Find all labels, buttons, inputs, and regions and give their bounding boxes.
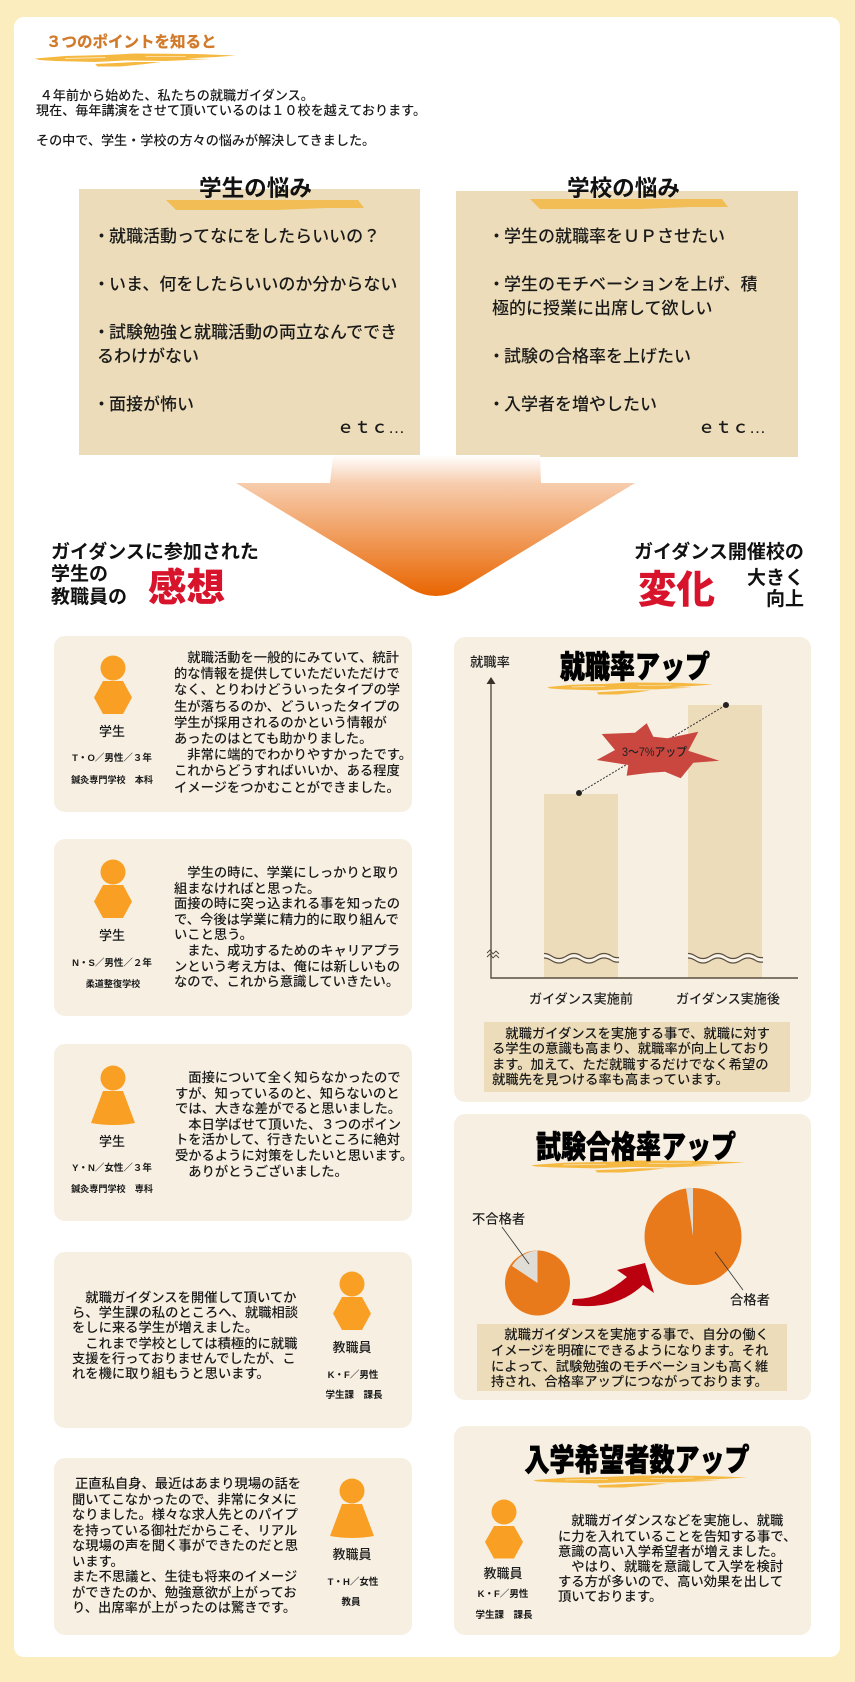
panel: employment rate up — [454, 637, 811, 1102]
description text: 就職ガイダンスなどを実施し、就職 — [571, 1513, 783, 1528]
person detail: K・F／男性 — [478, 1589, 528, 1600]
testimonial text: では、大きな差がでると思いました。 — [175, 1101, 401, 1116]
testimonial text: 面接の時に突っ込まれる事を知ったの — [174, 896, 400, 911]
panel: student worries — [79, 189, 420, 455]
description box — [484, 1022, 790, 1092]
testimonial text: 学生の時に、学業にしっかりと取り — [187, 865, 400, 880]
description text: 就職ガイダンスを実施する事で、自分の働く — [504, 1327, 769, 1342]
person label: 学生 — [99, 928, 125, 943]
testimonial text: 受かるように対策をしたいと思います。 — [175, 1148, 413, 1163]
bar chart: ガイダンス実施後 — [676, 990, 780, 1006]
person label: 教職員 — [332, 1547, 372, 1562]
testimonial text — [72, 1476, 301, 1615]
panel: school worries — [456, 191, 798, 457]
icon: male student — [94, 656, 132, 714]
description text: 就職先を見つける率も高まっています。 — [492, 1072, 729, 1087]
testimonial text: 非常に端的でわかりやすかったです。 — [187, 747, 412, 762]
person label: 学生 — [99, 724, 125, 739]
testimonial text: います。 — [72, 1554, 124, 1568]
title: ３つのポイントを知ると — [46, 34, 217, 51]
icon: female student — [91, 1066, 135, 1125]
heading: 試験合格率アップ — [536, 1130, 736, 1166]
heading lines: 教職員の — [51, 586, 127, 608]
brush underline — [533, 1476, 746, 1488]
testimonial text: れを機に取り組もうと思います。 — [72, 1366, 270, 1381]
etc note: ｅｔｃ… — [337, 418, 405, 437]
testimonial text: これからどうすればいいか、ある程度 — [174, 763, 400, 778]
testimonial text: 就職ガイダンスを開催して頂いてか — [85, 1290, 296, 1305]
description text: 持され、合格率アップにつながっております。 — [491, 1374, 768, 1389]
description text: 就職ガイダンスを実施する事で、就職に対す — [505, 1026, 770, 1041]
person detail: T・O／男性／３年 — [72, 753, 152, 764]
brush underline — [547, 682, 712, 694]
school name: 鍼灸専門学校 本科 — [71, 775, 153, 785]
description text — [491, 1327, 769, 1389]
testimonial text: 就職活動を一般的にみていて、統計 — [187, 650, 399, 665]
heading: student worries: 学生の悩み — [199, 176, 312, 201]
department: 学生課 課長 — [325, 1390, 382, 1401]
testimonial text: あったのはとても助かりました。 — [174, 731, 372, 746]
description text: 意識の高い入学希望者が増えました。 — [558, 1544, 784, 1559]
testimonial text: 面接について全く知らなかったので — [188, 1070, 401, 1085]
intro text: ４年前から始めた、私たちの就職ガイダンス。 — [40, 88, 314, 102]
heading lines: ガイダンスに参加された — [51, 542, 259, 562]
testimonial text: な現場の声を聞く事ができたのだと思 — [72, 1538, 298, 1553]
pie charts and arrow: 不合格者 — [472, 1212, 525, 1226]
bullet list: student worries: るわけがない — [97, 347, 199, 366]
testimonial text: ありがとうございました。 — [188, 1164, 348, 1179]
description text: やはり、就職を意識して入学を検討 — [571, 1559, 783, 1574]
heading lines: 学生の — [51, 564, 108, 585]
side text: 大きく — [747, 568, 804, 588]
heading underline — [530, 199, 728, 209]
bar chart: ガイダンス実施前 — [529, 990, 633, 1006]
testimonial text: なので、これから意識していきたい。 — [174, 974, 399, 989]
heading: 入学希望者数アップ — [524, 1444, 750, 1478]
person detail: N・S／男性／２年 — [72, 958, 152, 969]
bar chart: 3〜7%アップ — [622, 745, 687, 759]
bullet list: student worries: ・試験勉強と就職活動の両立なんででき — [93, 323, 397, 342]
intro text — [36, 88, 426, 148]
heading: school worries: 学校の悩み — [567, 176, 680, 201]
description text: に力を入れていることを告知する事で、 — [558, 1529, 796, 1544]
testimonial text — [174, 865, 400, 989]
panel: applicants up — [454, 1426, 811, 1635]
bullet list: student worries — [93, 227, 397, 414]
person label: 教職員 — [483, 1566, 522, 1581]
heading: change — [634, 542, 804, 612]
description text — [492, 1026, 770, 1087]
school name: 柔道整復学校 — [86, 979, 140, 989]
bullet list: student worries: ・就職活動ってなにをしたらいいの？ — [93, 227, 380, 246]
testimonial text: ができたのか、勉強意欲が上がってお — [72, 1584, 297, 1600]
testimonial text: なく、とりわけどういったタイプの学 — [174, 682, 400, 697]
bullet list: student worries: ・面接が怖い — [93, 395, 194, 414]
person label: 学生 — [99, 1134, 125, 1149]
panel: testimonial 4 — [54, 1252, 412, 1428]
icon: male staff — [485, 1500, 523, 1558]
pie charts and arrow — [472, 1188, 770, 1316]
intro text: 現在、毎年講演をさせて頂いているのは１０校を越えております。 — [36, 103, 426, 118]
brush underline: main title — [35, 54, 236, 66]
description text: ます。加えて、ただ就職するだけでなく希望の — [492, 1057, 769, 1072]
school name: 鍼灸専門学校 専科 — [71, 1184, 153, 1194]
person detail: Y・N／女性／３年 — [72, 1163, 152, 1174]
panel: exam pass rate up — [454, 1114, 811, 1400]
person detail: K・F／男性 — [328, 1370, 378, 1381]
testimonial text: 支援を行っておりませんでしたが、こ — [72, 1351, 296, 1366]
icon: male student — [94, 860, 132, 918]
bullet list: school worries: ・学生のモチベーションを上げ、積 — [488, 275, 757, 294]
icon: male staff — [333, 1272, 371, 1330]
highlight word: 感想 — [148, 567, 225, 610]
description text: 頂いております。 — [558, 1589, 662, 1604]
heading lines — [51, 542, 259, 608]
side text — [747, 568, 804, 610]
testimonial text: を持っている御社だからこそ、リアル — [72, 1522, 297, 1538]
department: 教員 — [341, 1597, 360, 1608]
testimonial text: ら、学生課の私のところへ、就職相談 — [72, 1305, 298, 1320]
side text: 向上 — [766, 589, 804, 610]
testimonial text: 生が落ちるのか、どういったタイプの — [174, 699, 400, 714]
testimonial text: いこと思う。 — [174, 927, 253, 942]
bullet list: student worries: ・いま、何をしたらいいのか分からない — [93, 275, 397, 294]
heading: 就職率アップ — [560, 650, 710, 686]
description text: る学生の意識も高まり、就職率が向上しており — [492, 1041, 770, 1056]
bullet list: school worries: ・試験の合格率を上げたい — [488, 347, 691, 366]
testimonial text: で、今後は学業に精力的に取り組んで — [174, 912, 399, 927]
highlight word: 変化 — [638, 568, 715, 612]
testimonial text — [174, 650, 412, 795]
testimonial text: なりました。様々な求人先とのパイプ — [72, 1507, 298, 1522]
testimonial text: ンという考え方は、俺には新しいもの — [174, 959, 400, 974]
heading line: ガイダンス開催校の — [634, 542, 804, 562]
department: 学生課 課長 — [475, 1610, 532, 1621]
testimonial text: 正直私自身、最近はあまり現場の話を — [75, 1476, 301, 1491]
bullet list: school worries: ・学生の就職率をＵＰさせたい — [488, 227, 725, 246]
pie charts and arrow: 合格者 — [730, 1292, 770, 1308]
heading underline — [166, 200, 364, 210]
testimonial text — [175, 1070, 413, 1179]
testimonial text: 聞いてこなかったので、非常にタメに — [72, 1492, 297, 1506]
bar chart: 就職率 — [470, 654, 510, 670]
panel: testimonial 2 — [54, 839, 412, 1016]
bullet list: school worries: ・入学者を増やしたい — [488, 395, 657, 414]
panel: testimonial 1 — [54, 636, 412, 812]
description text: する方が多いので、高い効果を出して — [558, 1574, 783, 1589]
testimonial text: また、成功するためのキャリアプラ — [187, 943, 400, 958]
testimonial text: 組まなければと思った。 — [174, 881, 320, 896]
person detail: T・H／女性 — [328, 1577, 378, 1588]
brush underline — [531, 1160, 744, 1172]
bar chart — [470, 654, 798, 1006]
panel: testimonial 3 — [54, 1044, 412, 1221]
description box — [477, 1324, 787, 1391]
bullet list: school worries: 極的に授業に出席して欲しい — [492, 299, 712, 318]
testimonial text: これまで学校としては積極的に就職 — [85, 1336, 297, 1351]
testimonial text: イメージをつかむことができました。 — [174, 780, 400, 795]
intro text: その中で、学生・学校の方々の悩みが解決してきました。 — [36, 133, 375, 148]
description text — [558, 1513, 796, 1604]
testimonial text: すが、知っているのと、知らないのと — [175, 1086, 400, 1101]
person label: 教職員 — [332, 1340, 372, 1355]
testimonial text — [72, 1290, 298, 1381]
bullet list: school worries — [488, 227, 757, 414]
icon: female staff — [330, 1478, 374, 1538]
description text: イメージを明確にできるようになります。それ — [491, 1343, 768, 1358]
testimonial text: 学生が採用されるのかという情報が — [174, 715, 387, 730]
testimonial text: り、出席率が上がったのは驚きです。 — [72, 1600, 296, 1615]
etc note: ｅｔｃ… — [698, 418, 766, 437]
heading: impressions — [51, 542, 259, 610]
testimonial text: 的な情報を提供していただいただけで — [174, 666, 400, 681]
testimonial text: をしに来る学生が増えました。 — [72, 1320, 258, 1335]
panel: testimonial 5 — [54, 1458, 412, 1635]
arrow: large downward — [236, 455, 635, 596]
testimonial text: 本日学ばせて頂いた、３つのポイン — [188, 1117, 401, 1132]
testimonial text: また不思議と、生徒も将来のイメージ — [72, 1569, 297, 1584]
description text: によって、試験勉強のモチベーションも高く維 — [491, 1359, 768, 1374]
testimonial text: トを活かして、行きたいところに絶対 — [175, 1132, 400, 1147]
